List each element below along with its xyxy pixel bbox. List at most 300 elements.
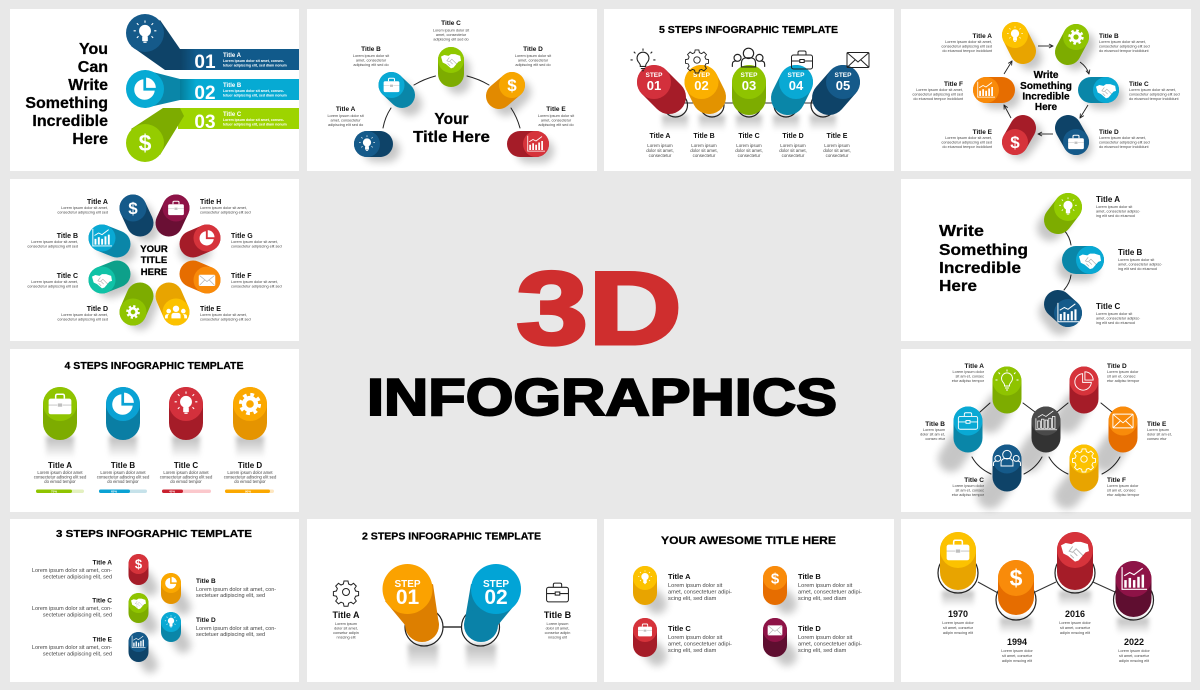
- heading: YOUR: [140, 244, 168, 255]
- progress bar C: 45%: [169, 490, 175, 494]
- label G: Lorem ipsum dolor sit amet,: [231, 240, 278, 244]
- label B: Lorem ipsum dolor sit: [353, 54, 390, 58]
- label C: [32, 598, 112, 618]
- cylinder D: [763, 618, 787, 656]
- label A: [327, 106, 365, 127]
- label G: consectetur adipiscing elit sed: [231, 244, 282, 248]
- label F: do eiusmod tempor incididunt: [913, 97, 964, 101]
- center title: 3D: 3D: [516, 251, 682, 367]
- label B: [544, 610, 572, 640]
- label B: Title B: [57, 233, 78, 240]
- heading: Write: [1034, 70, 1059, 81]
- label F: [1107, 477, 1140, 497]
- label E: Title E: [827, 133, 848, 140]
- label 2016: sit amet, consetur: [1060, 626, 1091, 630]
- label A: [646, 133, 674, 158]
- pill C: [438, 47, 464, 82]
- label A: [941, 33, 993, 53]
- label A: consectetur adipiscing elit sed: [57, 210, 108, 214]
- label D: etur adipisc tempor: [1107, 379, 1140, 383]
- step 02 ribbon: Lorem ipsum dolor sit amet, consec-: [223, 89, 285, 93]
- label E: consec etur: [1147, 437, 1167, 441]
- heading: 3 STEPS INFOGRAPHIC TEMPLATE: [56, 528, 252, 540]
- label A: sectetuer adipiscing elit, sed: [43, 574, 112, 580]
- label 1994: [1001, 637, 1033, 663]
- label D: adipiscing elit sed do: [515, 63, 551, 67]
- label A: consetur adipin: [333, 631, 359, 635]
- label B: amet, consectetur adipisc-: [1118, 262, 1163, 266]
- step 01 ribbon: Lorem ipsum dolor sit amet, consec-: [223, 59, 285, 63]
- label B: do eimod tempor: [107, 479, 139, 484]
- pill E: [1002, 128, 1030, 155]
- label D: Title D: [798, 624, 821, 633]
- cylinder C: [128, 593, 150, 626]
- label E: Lorem ipsum: [824, 143, 850, 148]
- label B: Lorem ipsum: [923, 428, 945, 432]
- label B: Lorem ipsum dolor amet: [100, 470, 146, 475]
- label E: Lorem ipsum dolor sit amet, con-: [32, 645, 112, 651]
- pill B: [1063, 24, 1089, 58]
- label C: consectetur adiscing elit sed: [160, 474, 213, 480]
- label C: consectetur adipiscing elit sed: [27, 284, 78, 288]
- label E: [1147, 421, 1172, 441]
- label A: Lorem ipsum dolor: [953, 370, 985, 374]
- connector arcs: [1064, 230, 1071, 290]
- label E: sectetuer adipiscing elit, sed: [43, 652, 112, 658]
- label C: consectetur adipiscing elit sed: [1129, 92, 1180, 96]
- step 05: 05: [836, 78, 850, 93]
- label A: Title A: [87, 199, 108, 206]
- label A: dolor sit amet,: [646, 148, 674, 153]
- label A: sit am et, consec: [956, 374, 984, 378]
- step 01 ribbon: 01: [194, 52, 216, 73]
- heading: Incredible: [939, 260, 1021, 277]
- cylinder A: $: [135, 556, 143, 572]
- label E: consectetur adipiscing elit sed: [941, 140, 992, 144]
- heading: Here: [1035, 102, 1058, 113]
- step 01: STEP: [646, 72, 663, 79]
- label D: Lorem ipsum dolor sit amet,: [61, 313, 108, 317]
- pill C: [1052, 299, 1082, 327]
- label E: consectetur: [826, 153, 849, 158]
- label 1994: Lorem ipsum dolor: [1001, 649, 1033, 653]
- label B: [798, 572, 862, 602]
- cylinder A: [43, 387, 77, 458]
- heading: Incredible: [32, 113, 108, 130]
- label B: Lorem ipsum dolor sit amet, con-: [196, 587, 276, 593]
- label A: amet, consectetuer adipi-: [668, 590, 732, 596]
- step 01 ribbon: [126, 14, 299, 73]
- label 1970: sit amet, consetur: [943, 626, 974, 630]
- heading: Title Here: [413, 129, 490, 146]
- label E: Title E: [973, 129, 993, 136]
- label D: Title D: [196, 617, 216, 624]
- step 03 ribbon: Title C: [223, 112, 242, 118]
- step 01 ribbon: Title A: [223, 53, 242, 59]
- heading: YOUR AWESOME TITLE HERE: [661, 535, 836, 547]
- label B: [690, 133, 718, 158]
- label E: adipiscing elit sed do: [538, 123, 574, 127]
- label 2022: sit amet, consetur: [1119, 654, 1150, 658]
- label F: Title F: [231, 273, 252, 280]
- panel: 3 steps: [10, 519, 299, 682]
- icon: briefcase: [792, 51, 812, 69]
- cylinder D: [161, 612, 183, 645]
- cylinder A: [633, 566, 657, 604]
- label 1994: sit amet, consetur: [1002, 654, 1033, 658]
- progress bar B: 65%: [111, 490, 117, 494]
- icon: briefcase: [547, 583, 568, 602]
- label B: nnscing elit: [548, 636, 568, 640]
- pill D: $: [507, 76, 517, 95]
- label B: Title B: [1118, 248, 1143, 257]
- label A: Lorem ipsum dolor sit: [668, 583, 723, 589]
- label B: consectetur adipiscing elit sed: [1099, 44, 1150, 48]
- step 03: [732, 65, 766, 131]
- label 2022: [1118, 637, 1150, 663]
- label 1970: adipin nnscing elit: [943, 631, 974, 635]
- connector arcs: [383, 76, 520, 128]
- pill A: $: [128, 199, 138, 218]
- label 2022: 2022: [1124, 637, 1144, 647]
- label B: do eiusmod tempor incididunt: [1099, 49, 1150, 53]
- pill A: [120, 194, 147, 230]
- progress bar A: [36, 490, 84, 494]
- 1970 cylinder: [938, 532, 978, 607]
- label 2022: adipin nnscing elit: [1119, 659, 1150, 663]
- label B: Lorem ipsum: [691, 143, 717, 148]
- pill B: [1070, 246, 1104, 274]
- label C: [160, 461, 213, 484]
- label D: [779, 133, 807, 158]
- label B: consectetur adiscing elit sed: [97, 474, 150, 480]
- label A: [1096, 195, 1141, 218]
- step 03 ribbon: $: [139, 130, 152, 156]
- cylinder C: [990, 444, 1022, 496]
- heading: Here: [939, 278, 977, 295]
- label A: Title A: [92, 560, 112, 566]
- label D: sit am et, consec: [1107, 374, 1136, 378]
- pill D: [120, 296, 146, 326]
- label C: ing elit sed do eiusmod: [1096, 321, 1135, 325]
- label C: [433, 20, 470, 42]
- heading: Here: [72, 131, 108, 148]
- pill C: [1091, 77, 1119, 103]
- label F: Lorem ipsum dolor sit amet,: [231, 280, 278, 284]
- label F: Lorem ipsum dolor sit amet,: [916, 88, 963, 92]
- 2022 cylinder: [1114, 561, 1154, 634]
- label A: Lorem ipsum: [335, 622, 357, 626]
- cylinder D: [233, 387, 267, 458]
- label E: [200, 306, 251, 322]
- label D: Title D: [238, 461, 262, 470]
- label D: Lorem ipsum dolor sit amet, con-: [196, 626, 276, 632]
- step 02: 02: [484, 586, 508, 609]
- heading: Your: [434, 111, 469, 128]
- heading: Write: [939, 223, 984, 240]
- label A: amet, consectetur adipisc-: [1096, 210, 1141, 214]
- label D: [224, 461, 277, 484]
- label C: Lorem ipsum dolor sit: [668, 635, 723, 641]
- label B: sectetuer adipiscing elit, sed: [196, 593, 265, 599]
- step 02: STEP: [693, 72, 711, 79]
- label A: Lorem ipsum dolor sit: [1096, 205, 1133, 209]
- connector arcs: [972, 403, 1120, 474]
- icon: gear: [333, 581, 359, 606]
- label A: Title A: [336, 106, 356, 113]
- label C: Lorem ipsum dolor amet: [163, 470, 209, 475]
- progress bar D: [225, 490, 274, 494]
- cylinder C: [169, 387, 203, 458]
- label A: Title A: [1096, 195, 1120, 204]
- step 01 ribbon: tetuer adipiscing elit, sed diam nonum: [223, 64, 287, 68]
- label B: dolor sit amet,: [690, 148, 718, 153]
- label 1970: Lorem ipsum dolor: [942, 621, 974, 625]
- step 04: STEP: [788, 72, 805, 79]
- step 02: [684, 65, 725, 131]
- label 2016: [1059, 609, 1091, 635]
- label D: Lorem ipsum dolor sit: [515, 54, 552, 58]
- panel: 5 steps: [604, 9, 894, 171]
- label B: Title B: [925, 421, 945, 428]
- label 2022: Lorem ipsum dolor: [1118, 649, 1150, 653]
- label D: Lorem ipsum: [780, 143, 806, 148]
- heading: Write: [68, 77, 108, 94]
- icon: envelope: [847, 52, 869, 68]
- label C: Lorem ipsum dolor sit: [433, 28, 470, 32]
- label D: Lorem ipsum dolor sit: [798, 635, 853, 641]
- label D: [515, 46, 552, 67]
- heading: Can: [78, 59, 108, 76]
- label E: [32, 636, 113, 658]
- label A: nnscing elit: [336, 636, 356, 640]
- heading: Something: [939, 242, 1028, 259]
- pill E: [162, 296, 190, 326]
- heading: [939, 223, 1028, 295]
- label D: Lorem ipsum dolor amet: [227, 470, 273, 475]
- label D: Lorem ipsum dolor: [1107, 370, 1139, 374]
- step 01: [382, 564, 443, 670]
- cylinder center: [1029, 406, 1060, 459]
- label C: Title C: [174, 461, 198, 470]
- label D: [57, 306, 108, 322]
- step 03 ribbon: tetuer adipiscing elit, sed diam nonum: [223, 122, 287, 126]
- label A: scing elit, sed diam: [668, 596, 717, 602]
- step 01: [637, 65, 688, 131]
- panel: you can write something incredible: [10, 9, 299, 171]
- label A: Title A: [972, 33, 992, 40]
- pill G: [190, 224, 220, 252]
- label B: [920, 421, 946, 441]
- panel: eight step flower: [10, 179, 299, 341]
- label H: consectetur adipiscing elit sed: [200, 210, 251, 214]
- label A: Lorem ipsum dolor amet: [37, 470, 83, 475]
- label D: amet, consectetuer adipi-: [798, 642, 862, 648]
- label D: Title D: [782, 133, 804, 140]
- panel: 2 steps: [307, 519, 597, 682]
- label B: [196, 578, 276, 599]
- step 04: [773, 65, 813, 131]
- pill E: $: [1010, 133, 1020, 152]
- step 05: [810, 65, 860, 131]
- label A: do eimod tempor: [44, 479, 76, 484]
- label A: consectetur adipiscing elit sed: [941, 44, 992, 48]
- label E: amet, consectetur: [541, 118, 572, 122]
- label D: [1107, 363, 1140, 383]
- label A: [34, 461, 87, 484]
- step 02 ribbon: 02: [194, 83, 216, 104]
- label C: [952, 477, 985, 497]
- progress bar D: 90%: [245, 490, 251, 494]
- label C: [1096, 302, 1141, 325]
- cylinder B: [951, 406, 982, 459]
- label E: [823, 133, 851, 158]
- label C: amet, consectetur: [436, 33, 467, 37]
- label D: Lorem ipsum dolor sit amet,: [1099, 136, 1146, 140]
- heading: You: [79, 41, 108, 58]
- label G: [231, 233, 282, 248]
- pill D: [499, 72, 525, 104]
- step 03 ribbon: 03: [194, 112, 216, 133]
- step 02 ribbon: [126, 70, 299, 108]
- label A: etur adipisc tempor: [952, 379, 985, 383]
- step 04: 04: [789, 78, 804, 93]
- pill E: [520, 131, 549, 157]
- label C: amet, consectetuer adipi-: [668, 642, 732, 648]
- label G: Title G: [231, 233, 253, 240]
- label E: Lorem ipsum dolor sit: [538, 114, 575, 118]
- label A: Title A: [48, 461, 72, 470]
- label C: Lorem ipsum dolor sit amet,: [31, 280, 78, 284]
- label C: Lorem ipsum dolor sit amet, con-: [32, 606, 112, 612]
- 1994 cylinder: [996, 560, 1036, 634]
- label C: Title C: [964, 477, 984, 484]
- label B: Lorem ipsum dolor sit amet,: [31, 240, 78, 244]
- pill D: [1063, 128, 1089, 155]
- label B: consectetur adipiscing elit sed: [27, 244, 78, 248]
- label C: Title C: [441, 20, 461, 27]
- label 1994: adipin nnscing elit: [1002, 659, 1033, 663]
- pill B: [378, 72, 410, 104]
- label C: do eiusmod tempor incididunt: [1129, 97, 1180, 101]
- label C: sectetuer adipiscing elit, sed: [43, 612, 112, 618]
- label 1970: [942, 609, 974, 635]
- label D: amet, consectetur: [518, 58, 549, 62]
- label A: Title A: [964, 363, 984, 370]
- cylinder B: $: [771, 570, 780, 588]
- panel: seven cylinder network: [901, 349, 1191, 512]
- cylinder A: [128, 554, 150, 588]
- step 05: STEP: [835, 72, 852, 79]
- label D: scing elit, sed diam: [798, 648, 847, 654]
- label D: consectetur: [782, 153, 805, 158]
- label F: [231, 273, 282, 288]
- label H: [200, 199, 251, 214]
- label B: Title B: [361, 46, 381, 53]
- heading: Something: [1020, 81, 1072, 92]
- label F: [912, 81, 964, 101]
- cylinder E: [1106, 406, 1138, 459]
- label B: [1099, 33, 1150, 53]
- step 01: 01: [396, 586, 419, 609]
- label A: Lorem ipsum dolor sit amet,: [945, 40, 992, 44]
- label E: Title E: [93, 636, 113, 644]
- label 2016: 2016: [1065, 609, 1085, 619]
- label D: Title D: [1099, 129, 1119, 136]
- label D: Title D: [87, 306, 108, 313]
- label B: Title B: [544, 610, 572, 620]
- label 1994: 1994: [1007, 637, 1027, 647]
- heading: Something: [25, 95, 108, 112]
- label C: [27, 273, 78, 288]
- label D: [196, 617, 276, 638]
- label E: Lorem ipsum dolor sit amet,: [945, 136, 992, 140]
- pill A: [1050, 193, 1082, 228]
- label E: dolor sit am et,: [1147, 432, 1172, 436]
- label C: scing elit, sed diam: [668, 648, 717, 654]
- label A: Title A: [649, 133, 671, 140]
- label B: [353, 46, 390, 67]
- cylinder D: [1067, 366, 1098, 420]
- cylinder F: [1067, 444, 1098, 496]
- pill A: [354, 131, 388, 157]
- label A: Title A: [332, 610, 360, 620]
- label D: do eimod tempor: [234, 479, 266, 484]
- progress bar A: 75%: [51, 490, 57, 494]
- heading: 2 STEPS INFOGRAPHIC TEMPLATE: [362, 532, 541, 542]
- heading: 5 STEPS INFOGRAPHIC TEMPLATE: [659, 25, 838, 36]
- pill F: [973, 77, 1008, 103]
- label E: Lorem ipsum dolor sit amet,: [200, 313, 247, 317]
- pill B: [88, 224, 124, 252]
- cylinder B: [763, 566, 787, 604]
- label C: Lorem ipsum dolor: [953, 484, 985, 488]
- cylinder E: [128, 632, 150, 665]
- label B: Title B: [798, 572, 821, 581]
- panel: three step write something: [901, 179, 1191, 341]
- label C: Lorem ipsum dolor sit: [1096, 312, 1133, 316]
- panel: timeline: [901, 519, 1191, 682]
- label C: [668, 624, 732, 654]
- label B: consectetur: [693, 153, 716, 158]
- label A: Lorem ipsum: [647, 143, 673, 148]
- label F: Title F: [944, 81, 963, 88]
- label C: adipiscing elit sed do: [433, 38, 469, 42]
- step 02: STEP: [483, 579, 509, 590]
- label A: amet, consectetur: [331, 118, 361, 122]
- label B: [97, 461, 150, 484]
- label B: [1118, 248, 1163, 271]
- label D: dolor sit amet,: [779, 148, 807, 153]
- step 02: 02: [694, 78, 709, 93]
- cylinder B: [106, 387, 140, 458]
- label A: [668, 572, 732, 602]
- icon: people: [732, 48, 765, 67]
- label H: Title H: [200, 199, 221, 206]
- panel: six step cycle: [901, 9, 1191, 171]
- label D: consectetur adipiscing elit sed: [1099, 140, 1150, 144]
- label B: [27, 233, 78, 248]
- label C: Title C: [668, 624, 691, 633]
- progress bar C: [162, 490, 211, 494]
- label B: dolor sit amet,: [546, 626, 569, 630]
- cylinder A: [990, 366, 1022, 420]
- label E: [538, 106, 575, 127]
- pill H: [162, 194, 190, 223]
- label C: Title C: [738, 133, 760, 140]
- label C: Lorem ipsum dolor sit amet,: [1129, 88, 1176, 92]
- label E: Title E: [200, 306, 221, 313]
